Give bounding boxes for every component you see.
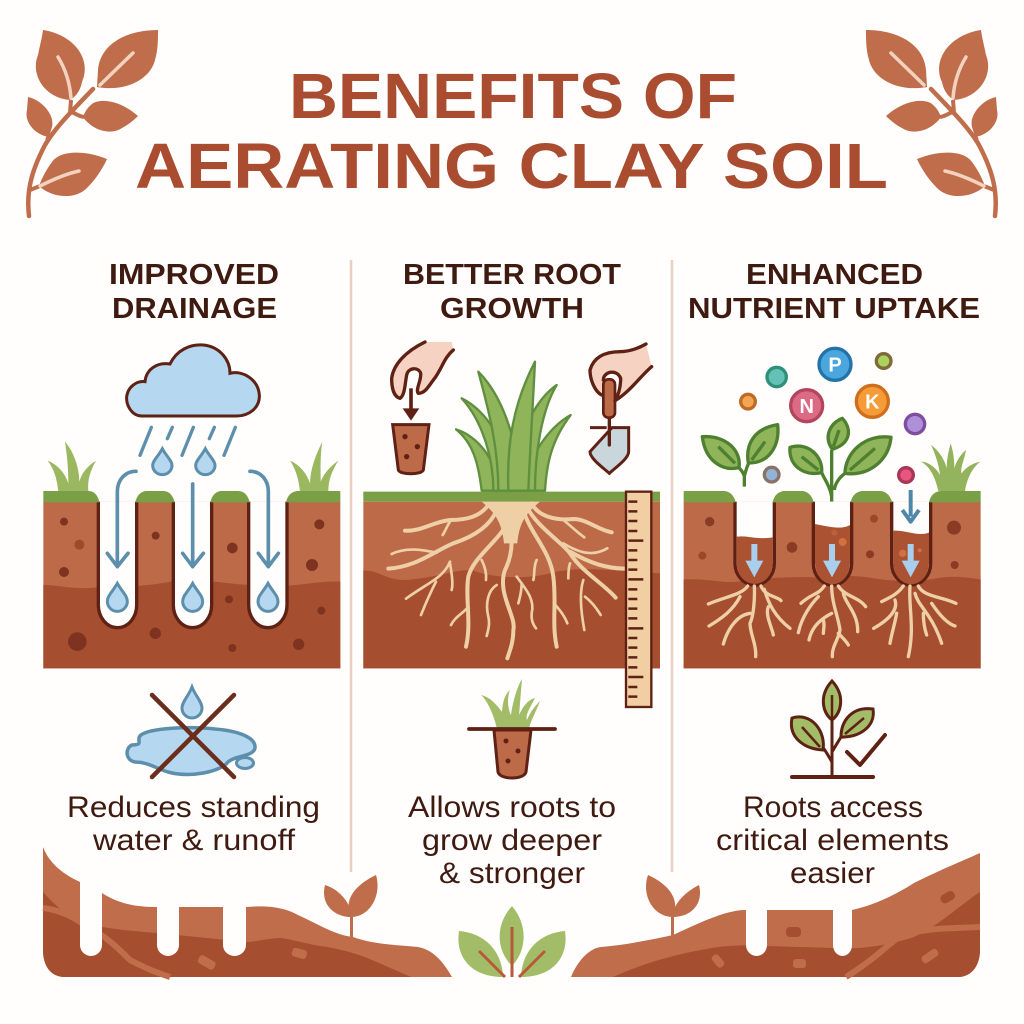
- illustration: rain draining through aeration holes: [43, 345, 340, 668]
- decorative branch: top right: [866, 30, 997, 216]
- decorative branch: top left: [27, 30, 158, 216]
- arrows into holes: [745, 490, 920, 577]
- green turf: [684, 491, 981, 502]
- text: root benefit: Allows roots to: [408, 791, 616, 824]
- nutrient bubbles NPK: N: [799, 396, 814, 418]
- heading: enhanced nutrient uptake: NUTRIENT UPTAKE: [688, 293, 980, 325]
- soil: [363, 502, 660, 668]
- icon: hand with trowel: [590, 344, 652, 473]
- footer: soil strip right: [571, 853, 980, 977]
- text: drainage benefit: [67, 791, 320, 857]
- ruler: [626, 492, 651, 707]
- illustration: roots in soil: [363, 342, 660, 707]
- arrows: water flow: [107, 471, 278, 567]
- title: AERATING CLAY SOIL: [135, 130, 888, 202]
- panel: better root growth: [363, 259, 660, 890]
- icon: sprout left: [324, 875, 378, 939]
- rain streaks: [140, 427, 235, 455]
- roots: [708, 586, 956, 657]
- footer: soil strip left: [43, 847, 452, 977]
- icon: bottom centre sprout: [458, 906, 566, 977]
- soil cross-section: [43, 502, 340, 668]
- grass plant: [456, 362, 571, 491]
- icon: grass plug: [469, 679, 555, 778]
- green turf: [43, 491, 340, 502]
- icon: no standing water: [127, 687, 255, 777]
- soil spots: [698, 515, 961, 569]
- heading: better root growth: BETTER ROOT: [403, 259, 621, 291]
- heading: enhanced nutrient uptake: [688, 259, 980, 325]
- water drops: [107, 449, 278, 611]
- text: root benefit: & stronger: [439, 857, 585, 890]
- icon: rain cloud: [127, 345, 259, 416]
- grass tuft: [921, 443, 980, 491]
- seedlings: [702, 418, 891, 520]
- title: [135, 60, 888, 202]
- text: nutrient benefit: [716, 791, 949, 890]
- text: nutrient benefit: critical elements: [716, 824, 949, 857]
- icon: sprout right: [646, 875, 700, 939]
- nutrient bubbles NPK: K: [865, 392, 880, 414]
- aeration holes with soil fill: [735, 502, 931, 585]
- grass tufts: [48, 442, 338, 492]
- nutrient bubbles NPK: [741, 348, 925, 522]
- icon: hand with arrow and soil plug: [392, 342, 453, 474]
- heading: improved drainage: [109, 259, 279, 325]
- panel: improved drainage: [43, 259, 340, 857]
- text: nutrient benefit: easier: [790, 857, 875, 890]
- text: drainage benefit: Reduces standing: [67, 791, 320, 824]
- heading: improved drainage: DRAINAGE: [112, 293, 277, 325]
- text: drainage benefit: water & runoff: [92, 824, 296, 857]
- text: root benefit: [408, 791, 616, 890]
- heading: better root growth: GROWTH: [440, 293, 584, 325]
- soil: [684, 502, 981, 668]
- title: BENEFITS OF: [289, 60, 737, 132]
- heading: improved drainage: IMPROVED: [109, 259, 279, 291]
- illustration: nutrients entering soil: [684, 348, 981, 668]
- panel: enhanced nutrient uptake: [684, 259, 981, 890]
- heading: better root growth: [403, 259, 621, 325]
- aeration holes: [98, 502, 287, 628]
- heading: enhanced nutrient uptake: ENHANCED: [746, 259, 923, 291]
- roots: [388, 502, 625, 658]
- icon: plant with checkmark: [791, 681, 885, 777]
- text: root benefit: grow deeper: [422, 824, 602, 857]
- text: nutrient benefit: Roots access: [743, 791, 923, 824]
- nutrient bubbles NPK: P: [828, 354, 842, 376]
